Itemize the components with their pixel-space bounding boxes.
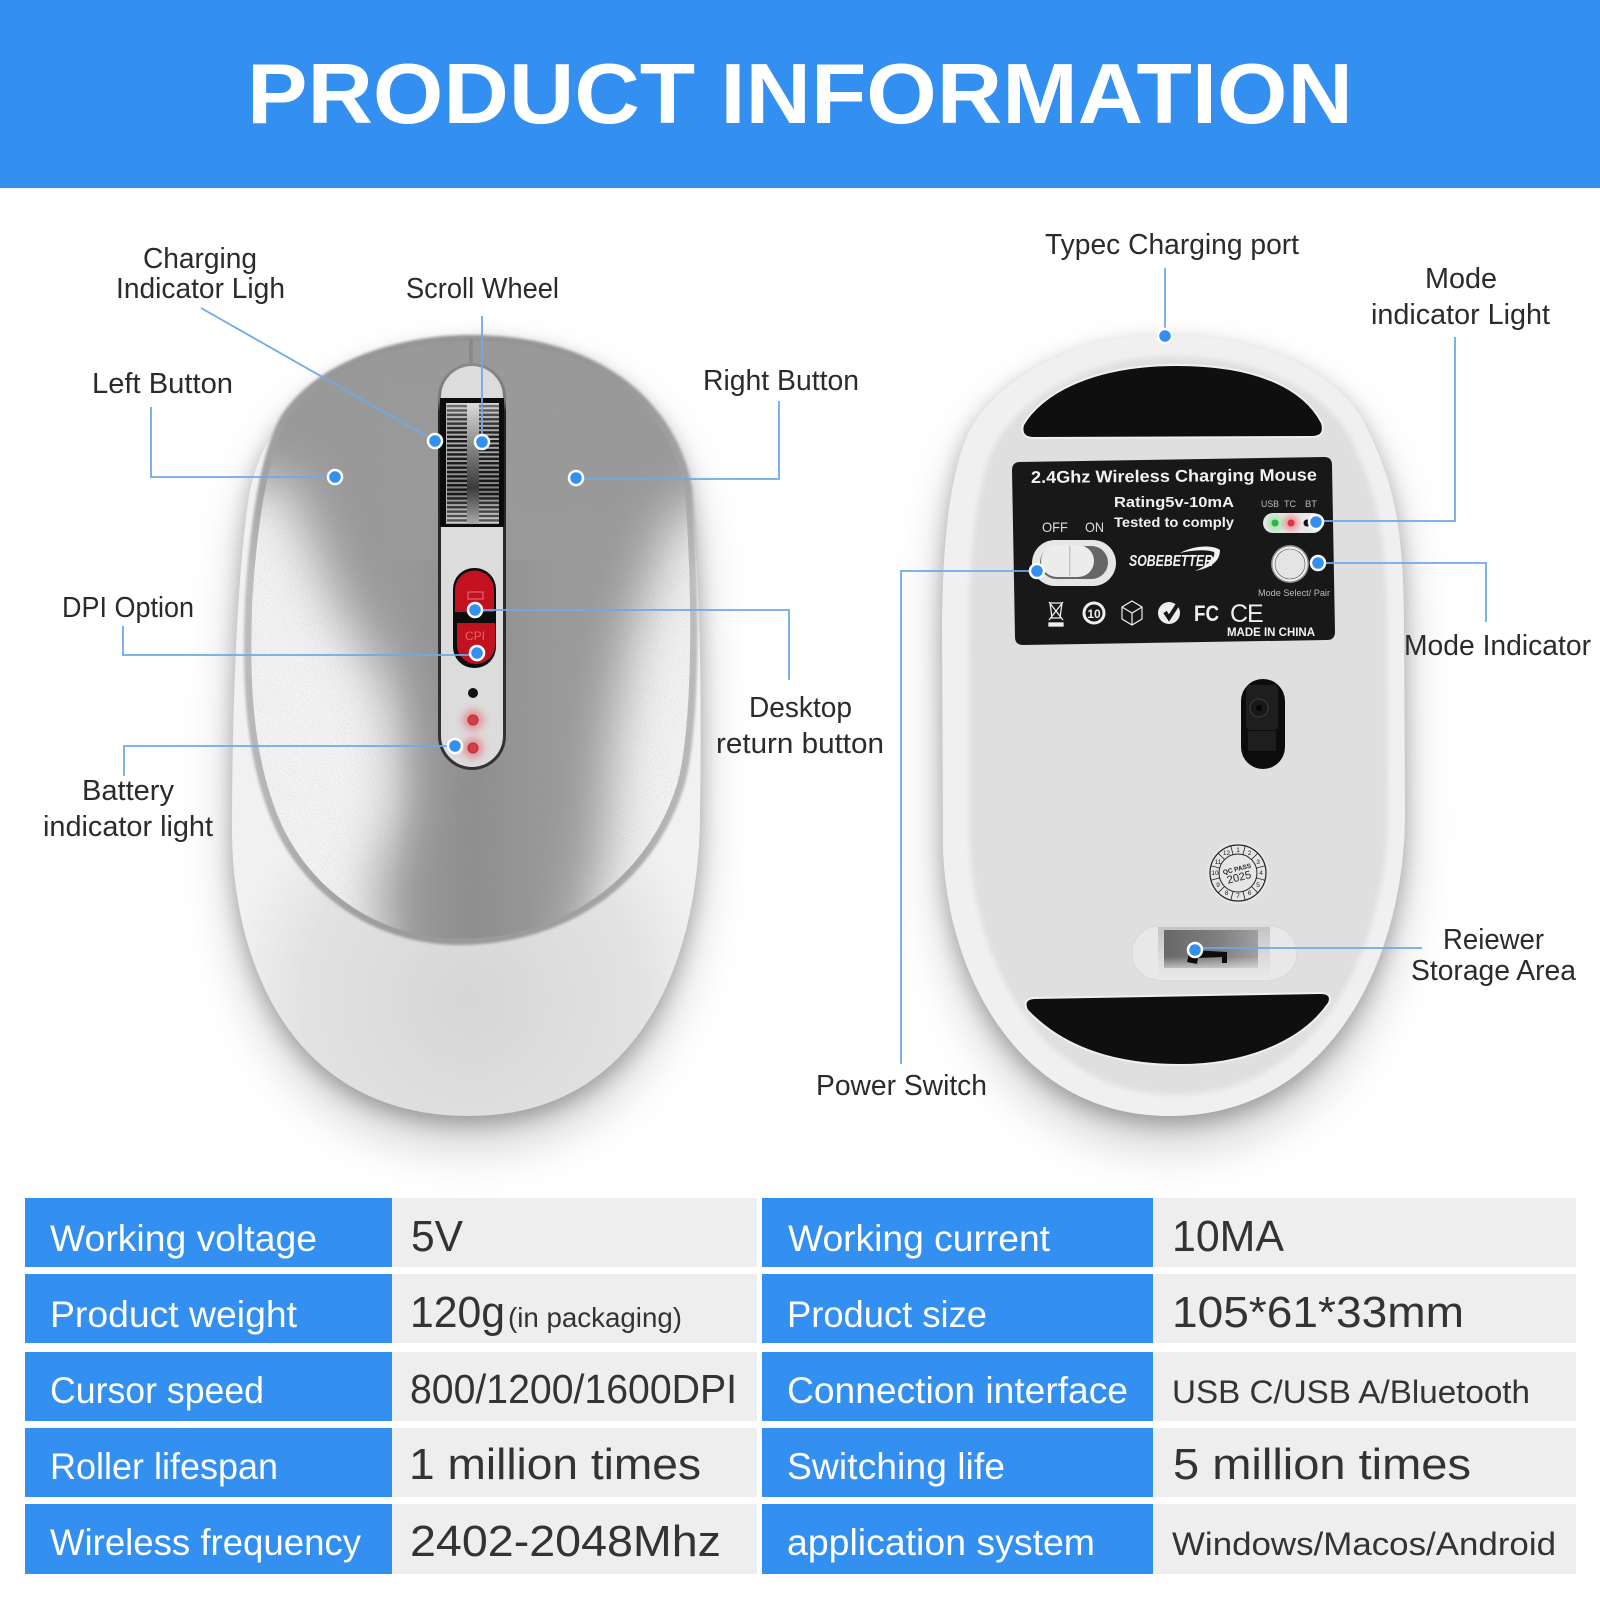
row: working voltage / current: Working voltage: [50, 1218, 317, 1259]
QC seal: 3: [1256, 859, 1260, 866]
callout: Charging Indicator Light: Charging: [143, 243, 257, 275]
QC seal: QC PASS: [1222, 863, 1253, 876]
row: roller / switching life: Switching life: [787, 1446, 1005, 1487]
mouse top view: [200, 330, 740, 1144]
callout: Receiver Storage Area: Reiewer: [1443, 924, 1544, 956]
callout: Charging Indicator Light: Indicator Ligh: [116, 273, 285, 305]
QC seal: [1207, 842, 1269, 904]
icon: cube: [1122, 601, 1142, 625]
sticker text: Rating5v-10mA: [1114, 494, 1234, 511]
specification table: [25, 1198, 1576, 1574]
row: weight / size: Product weight: [50, 1294, 298, 1335]
callout: Typec Charging port: Typec Charging port: [1045, 229, 1299, 261]
row: working voltage / current: 5V: [411, 1212, 464, 1261]
scroll wheel: [446, 403, 499, 524]
icon: CE mark: E: [1247, 600, 1264, 628]
sticker text: USB: [1261, 499, 1279, 509]
silver top cover: [242, 334, 699, 946]
callout: Mode indicator Light: Mode: [1425, 263, 1497, 295]
row: working voltage / current: 10MA: [1172, 1212, 1285, 1261]
callout: Left Button: [92, 368, 342, 484]
top skate pad: [1022, 365, 1323, 438]
row: roller / switching life: 1 million times: [409, 1440, 701, 1489]
row: roller / switching life: [25, 1428, 1576, 1497]
row: roller / switching life: 5 million times: [1173, 1440, 1471, 1489]
bottom skate pad: [1026, 993, 1330, 1065]
callout: Right Button: [569, 365, 859, 485]
callout: Scroll Wheel: Scroll Wheel: [406, 273, 559, 305]
row: cursor speed / connection: Cursor speed: [50, 1370, 264, 1411]
callout: Left Button: Left Button: [92, 368, 233, 400]
mouse bottom view: [942, 335, 1405, 1144]
sticker text: ON: [1085, 519, 1104, 535]
receiver storage area: [1132, 926, 1297, 980]
QC seal: 10: [1211, 870, 1219, 877]
QC seal: 11: [1215, 859, 1222, 866]
row: working voltage / current: Working current: [788, 1218, 1051, 1259]
brand logo: SOBEBETTER: [1129, 553, 1214, 570]
icon: CE mark: [1230, 600, 1264, 628]
row: cursor speed / connection: USB C/USB A/Bluetooth: [1172, 1374, 1530, 1410]
callout: Mode Indicator: [1311, 556, 1591, 662]
DPI and desktop buttons: [453, 568, 496, 668]
callout: Power Switch: [816, 564, 1044, 1102]
QC seal: 1: [1236, 847, 1240, 854]
QC seal: 7: [1236, 893, 1240, 900]
row: cursor speed / connection: Connection interface: [787, 1370, 1128, 1411]
sticker text: Mode Select/ Pair: [1258, 588, 1330, 599]
row: roller / switching life: Roller lifespan: [50, 1446, 278, 1487]
icon: RoHS 10: 10: [1087, 607, 1101, 621]
title: PRODUCT INFORMATION: [247, 47, 1353, 142]
row: weight / size: Product size: [787, 1294, 987, 1335]
callout: Desktop return button: [468, 603, 884, 760]
callout: Battery indicator light: indicator light: [43, 811, 213, 843]
sticker text: [1031, 466, 1330, 639]
callout: Power Switch: Power Switch: [816, 1070, 987, 1102]
row: weight / size: 105*61*33mm: [1172, 1288, 1464, 1337]
sticker text: Tested to comply: [1114, 514, 1234, 530]
spec label sticker: [1012, 457, 1335, 645]
icon: CE mark: C: [1230, 600, 1248, 628]
sticker text: TC: [1284, 499, 1296, 509]
brand logo: [1129, 547, 1220, 571]
sticker text: BT: [1305, 499, 1318, 509]
battery indicator lights: [463, 688, 483, 758]
QC seal: 2025: [1226, 869, 1253, 887]
scroll slot: [438, 338, 506, 770]
callout: Scroll Wheel: [406, 273, 559, 449]
row: wireless frequency / application system: application system: [787, 1522, 1095, 1563]
callout: DPI Option: [62, 592, 484, 660]
icon: crossed bin: [1049, 602, 1063, 626]
icon: CCC mark: [1158, 602, 1180, 624]
QC seal: 4: [1259, 870, 1263, 877]
callout: Typec Charging port: [1045, 229, 1299, 343]
row: cursor speed / connection: [25, 1352, 1576, 1421]
row: wireless frequency / application system: [25, 1504, 1576, 1574]
QC seal: 5: [1256, 882, 1260, 889]
mode indicator LEDs: [1263, 513, 1323, 533]
QC seal: 8: [1225, 890, 1229, 897]
callout: Desktop return button: Desktop: [749, 692, 852, 724]
icon: FC mark: FC: [1194, 601, 1219, 626]
row: wireless frequency / application system: Windows/Macos/Android: [1172, 1526, 1556, 1562]
row: weight / size: [25, 1274, 1576, 1343]
callout: Charging Indicator Light: [116, 243, 442, 448]
sticker text: 2.4Ghz Wireless Charging Mouse: [1031, 466, 1317, 487]
sticker text: MADE IN CHINA: [1227, 627, 1315, 639]
callout: Battery indicator light: Battery: [82, 775, 174, 807]
sticker text: OFF: [1042, 519, 1068, 535]
QC seal: 2: [1248, 850, 1252, 857]
callout: Mode indicator Light: indicator Light: [1371, 299, 1550, 331]
row: weight / size: (in packaging): [508, 1302, 682, 1333]
QC seal: 9: [1216, 882, 1220, 889]
mode select button: [1271, 545, 1309, 583]
power switch: [1032, 540, 1116, 586]
QC seal: 6: [1248, 890, 1252, 897]
callout: Right Button: Right Button: [703, 365, 859, 397]
row: cursor speed / connection: 800/1200/1600DPI: [410, 1366, 737, 1412]
compliance icons: [1049, 600, 1264, 628]
callout: DPI Option: DPI Option: [62, 592, 194, 624]
icon: RoHS 10: [1084, 603, 1104, 623]
callout: Receiver Storage Area: Storage Area: [1411, 955, 1577, 987]
DPI and desktop buttons: CPI: [465, 629, 485, 643]
QC seal: 12: [1223, 850, 1230, 857]
header banner: [0, 0, 1600, 188]
callout: Mode Indicator: Mode Indicator: [1404, 630, 1591, 662]
callout: Desktop return button: return button: [716, 728, 884, 760]
row: weight / size: 120g: [410, 1288, 505, 1337]
row: wireless frequency / application system: 2402-2048Mhz: [410, 1517, 721, 1566]
optical sensor: [1241, 679, 1285, 769]
row: working voltage / current: [25, 1198, 1576, 1267]
callout: Receiver Storage Area: [1188, 924, 1577, 987]
callout: Mode indicator Light: [1309, 263, 1550, 529]
row: wireless frequency / application system: Wireless frequency: [50, 1522, 361, 1563]
callout: Battery indicator light: [43, 739, 462, 843]
